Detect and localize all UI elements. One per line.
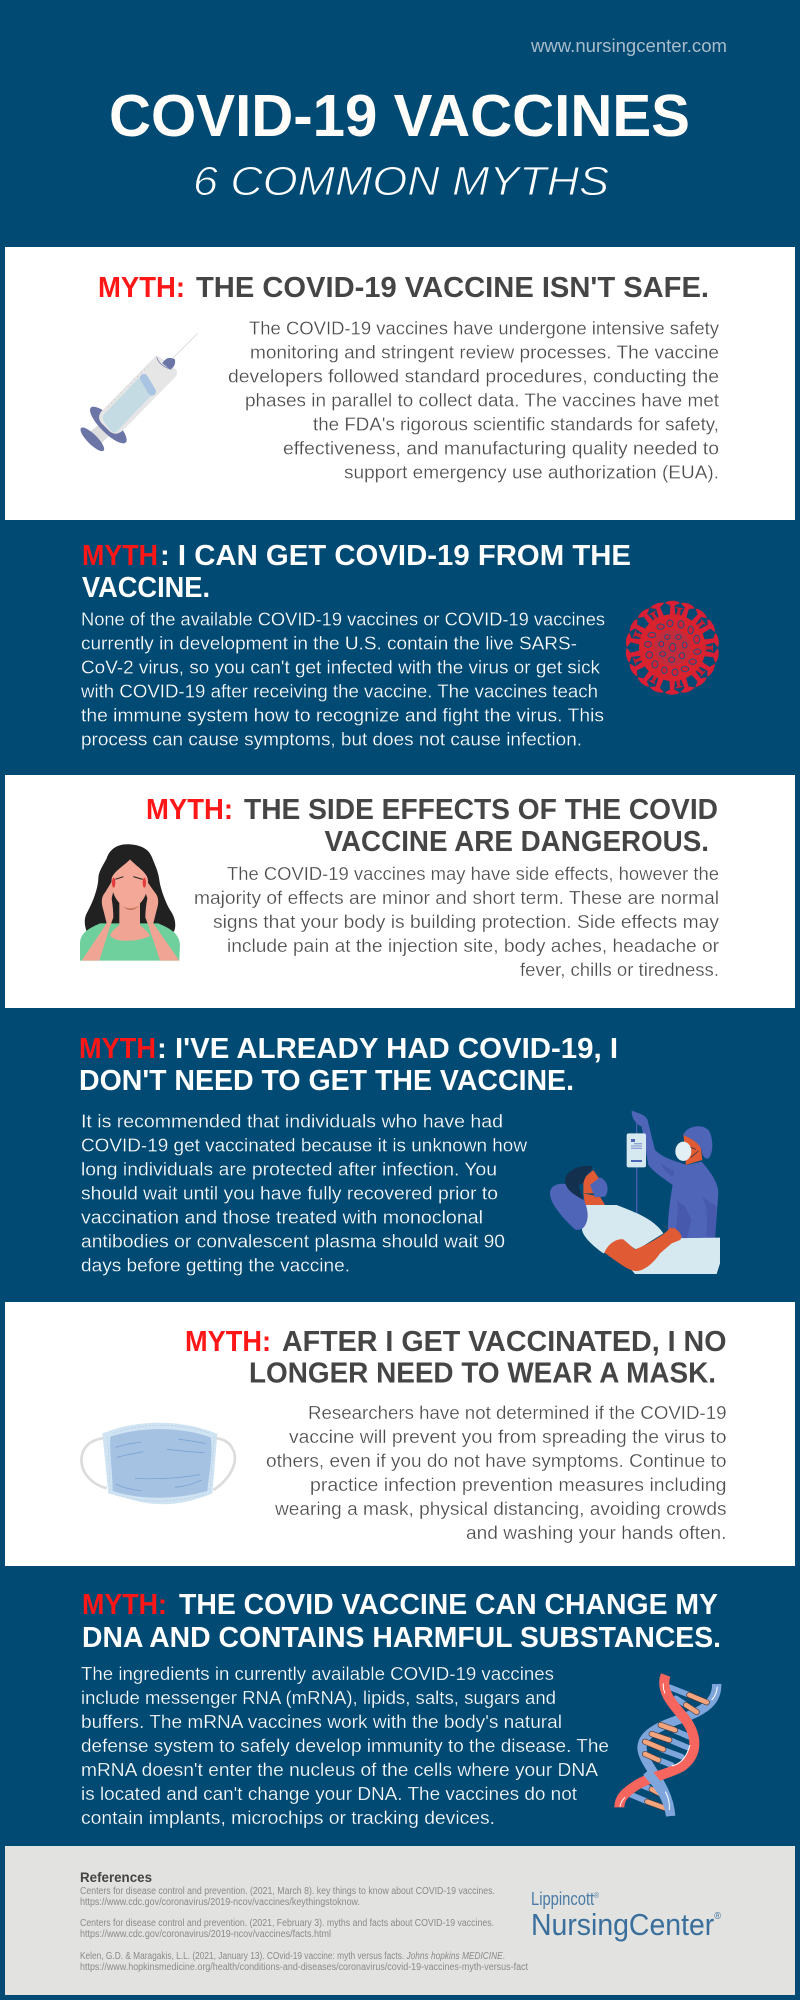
heading: myth 1: MYTH: (98, 272, 185, 304)
text block: myth 3: majority of effects are minor and short term. These are normal (194, 887, 719, 908)
heading: myth 5 (185, 1326, 726, 1390)
text block: myth 6: The ingredients in currently available COVID-19 vaccines (81, 1663, 554, 1684)
text block: myth 5 (266, 1402, 726, 1543)
text block: myth 6: defense system to safely develop immunity to the disease. The (81, 1735, 609, 1756)
panel: references (5, 1846, 795, 1995)
text block: myth 5: practice infection prevention measures including (310, 1474, 726, 1495)
text block: myth 1: developers followed standard procedures, conducting the (228, 366, 719, 386)
text block: myth 4: long individuals are protected after infection. You (81, 1158, 497, 1180)
heading: myth 3: THE SIDE EFFECTS OF THE COVID (244, 794, 718, 826)
heading: myth 2 (82, 540, 631, 604)
heading: myth 4 (79, 1033, 618, 1097)
text block: reference list: Centers for disease control and prevention. (2021, February 3). myths and facts about COVID-19 vaccines. (80, 1918, 494, 1929)
heading: references: References (80, 1869, 152, 1885)
heading: myth 2: VACCINE. (82, 572, 210, 604)
text block: myth 5: wearing a mask, physical distancing, avoiding crowds (274, 1498, 726, 1519)
heading: myth 3: VACCINE ARE DANGEROUS. (324, 826, 709, 858)
text block: myth 6 (81, 1663, 609, 1828)
icon: face mask (81, 1423, 235, 1504)
text block: myth 4: It is recommended that individuals who have had (81, 1110, 503, 1132)
panel: myth 3 (5, 775, 795, 1008)
text block: reference list: https://www.hopkinsmedicine.org/health/conditions-and-diseases/coronavirus/covid-19-vaccines-myth-versus-fact (80, 1962, 528, 1973)
heading: myth 4: DON'T NEED TO GET THE VACCINE. (79, 1065, 574, 1097)
text block: myth 4: vaccination and those treated with monoclonal (81, 1206, 483, 1228)
text block: myth 1: monitoring and stringent review processes. The vaccine (250, 342, 719, 362)
text block: myth 2: None of the available COVID-19 vaccines or COVID-19 vaccines (81, 609, 605, 630)
heading: myth 2: : I CAN GET COVID-19 FROM THE (160, 540, 631, 572)
heading: myth 4: MYTH (79, 1033, 156, 1065)
heading: myth 3 (146, 794, 718, 858)
heading: myth 6 (82, 1589, 721, 1654)
text block: myth 6: buffers. The mRNA vaccines work with the body's natural (81, 1711, 562, 1732)
heading: myth 6: THE COVID VACCINE CAN CHANGE MY (179, 1589, 718, 1621)
panel: myth 6 (81, 1589, 721, 1828)
title: COVID-19 VACCINES (109, 83, 690, 149)
heading: myth 3: MYTH: (146, 794, 233, 826)
text block: myth 4: antibodies or convalescent plasma should wait 90 (81, 1230, 505, 1252)
text block: myth 3: signs that your body is building protection. Side effects may (213, 911, 720, 932)
icon: dna helix (619, 1675, 717, 1816)
text block: myth 6: contain implants, microchips or tracking devices. (81, 1807, 495, 1828)
text block: myth 1: The COVID-19 vaccines have undergone intensive safety (249, 318, 720, 338)
text block: myth 4: COVID-19 get vaccinated because it is unknown how (81, 1134, 528, 1156)
logo: Lippincott NursingCenter: ® (714, 1911, 722, 1922)
icon: nurse and patient (550, 1111, 720, 1274)
text block: myth 4 (81, 1110, 528, 1276)
logo: Lippincott NursingCenter: NursingCenter (531, 1907, 731, 1942)
text block: myth 5: Researchers have not determined if the COVID-19 (308, 1402, 726, 1423)
text block: myth 5: vaccine will prevent you from spreading the virus to (289, 1426, 726, 1447)
text block: myth 3: include pain at the injection site, body aches, headache or (227, 935, 719, 956)
text block: reference list: https://www.cdc.gov/coronavirus/2019-ncov/vaccines/facts.html (80, 1929, 331, 1940)
heading: myth 6: MYTH: (82, 1589, 167, 1621)
heading: myth 6: DNA AND CONTAINS HARMFUL SUBSTANCES. (82, 1622, 721, 1654)
text block: myth 2: with COVID-19 after receiving the vaccine. The vaccines teach (80, 681, 598, 702)
icon: syringe (77, 333, 198, 454)
panel: myth 4 (79, 1033, 720, 1276)
panel: myth 5 (5, 1302, 795, 1566)
text block: reference list: https://www.cdc.gov/coronavirus/2019-ncov/vaccines/keythingstoknow. (80, 1897, 360, 1908)
text block: myth 5: others, even if you do not have symptoms. Continue to (266, 1450, 726, 1471)
heading: myth 5: AFTER I GET VACCINATED, I NO (282, 1326, 726, 1358)
heading: myth 5: MYTH: (185, 1326, 271, 1358)
text block: myth 2: CoV-2 virus, so you can't get infected with the virus or get sick (81, 657, 601, 678)
heading: myth 5: LONGER NEED TO WEAR A MASK. (249, 1358, 716, 1390)
text block: myth 2: currently in development in the U.S. contain the live SARS- (81, 633, 577, 654)
heading: myth 4: : I'VE ALREADY HAD COVID-19, I (157, 1033, 618, 1065)
text block: myth 1 (228, 318, 720, 482)
text block: myth 2 (80, 609, 605, 750)
text block: myth 6: include messenger RNA (mRNA), lipids, salts, sugars and (81, 1687, 556, 1708)
text block: myth 3 (194, 863, 720, 980)
logo: Lippincott NursingCenter: Lippincott (531, 1889, 608, 1909)
logo: Lippincott NursingCenter (531, 1889, 722, 1942)
text block: myth 3: The COVID-19 vaccines may have side effects, however the (227, 863, 719, 884)
text block: myth 1: support emergency use authorization (EUA). (344, 462, 719, 482)
text block: myth 1: effectiveness, and manufacturing quality needed to (283, 438, 719, 458)
panel: myth 1 (5, 247, 795, 520)
subtitle: 6 COMMON MYTHS (193, 158, 609, 204)
text block: myth 3: fever, chills or tiredness. (520, 959, 719, 980)
icon: woman with headache (80, 844, 180, 961)
text block: myth 6: mRNA doesn't enter the nucleus of the cells where your DNA (81, 1759, 599, 1780)
heading: myth 1: THE COVID-19 VACCINE ISN'T SAFE. (196, 272, 709, 304)
text block: myth 1: the FDA's rigorous scientific standards for safety, (313, 414, 719, 434)
text block: reference list: Kelen, G.D. & Maragakis, L.L. (2021, January 13). COvid-19 vaccine: myth versus facts. Johns hopkins MEDICINE. (80, 1951, 505, 1962)
text block: myth 4: should wait until you have fully recovered prior to (81, 1182, 498, 1204)
text block: myth 5: and washing your hands often. (466, 1522, 726, 1543)
heading: myth 2: MYTH (82, 540, 158, 572)
icon: virus (625, 601, 720, 695)
panel: myth 2 (80, 540, 720, 750)
website url: www.nursingcenter.com (530, 36, 727, 56)
text block: myth 2: the immune system how to recognize and fight the virus. This (81, 705, 604, 726)
text block: reference list (80, 1886, 528, 1973)
text block: myth 2: process can cause symptoms, but does not cause infection. (81, 729, 582, 750)
text block: reference list: Centers for disease control and prevention. (2021, March 8). key things to know about COVID-19 vaccines. (80, 1886, 495, 1897)
text block: myth 4: days before getting the vaccine. (81, 1254, 350, 1276)
text block: myth 6: is located and can't change your DNA. The vaccines do not (81, 1783, 577, 1804)
text block: myth 1: phases in parallel to collect data. The vaccines have met (245, 390, 719, 410)
logo: Lippincott NursingCenter: ® (594, 1891, 599, 1900)
